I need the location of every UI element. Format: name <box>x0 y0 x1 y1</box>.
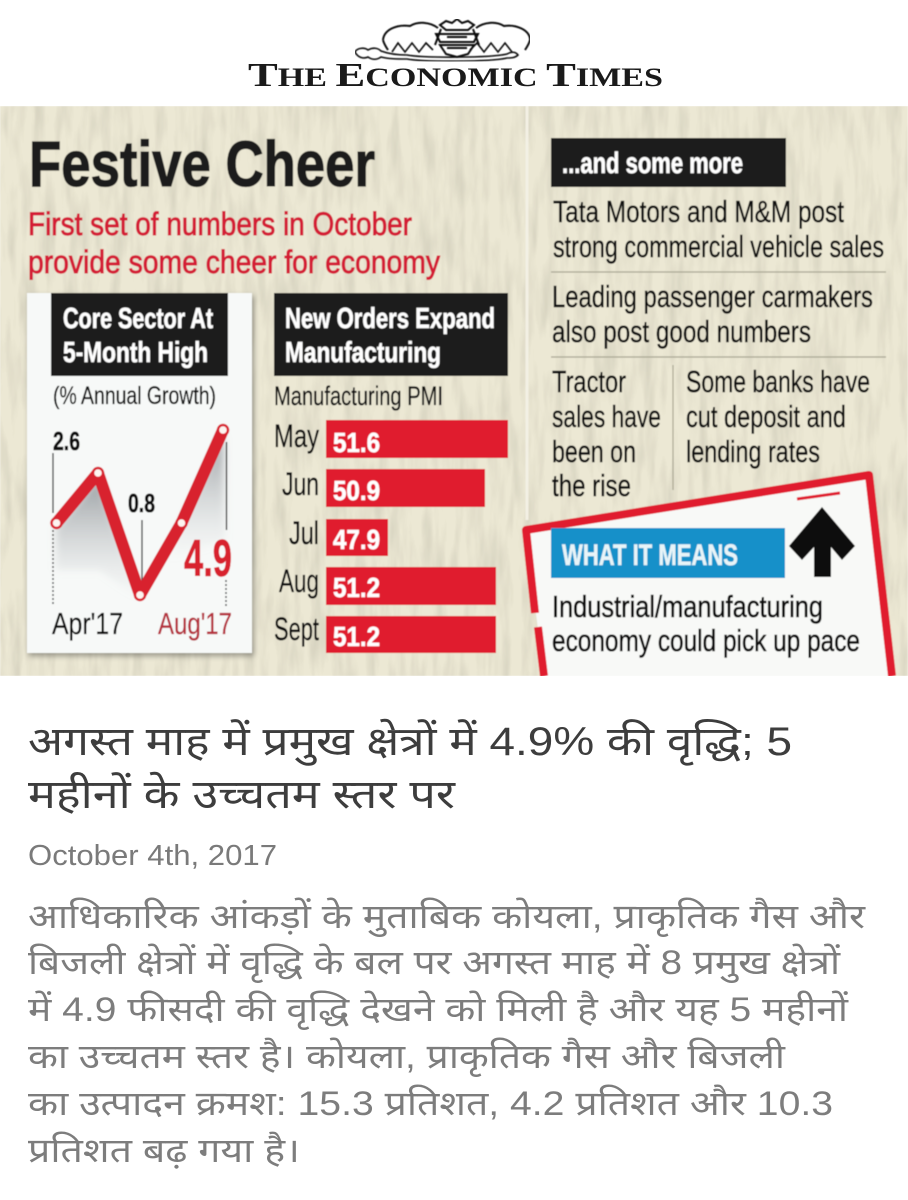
article body: आधिकारिक आंकड़ों के मुताबिक कोयला, प्राकृतिक गैस और <box>28 897 866 937</box>
axis labels: Apr'17 <box>52 606 123 641</box>
data labels: 2.6 <box>53 426 80 456</box>
data labels <box>53 426 232 588</box>
line chart <box>52 425 232 641</box>
icon: up arrow <box>789 507 855 577</box>
item: banks: cut deposit and <box>686 399 846 434</box>
item: banks: lending rates <box>686 434 820 469</box>
header: and some more: ...and some more <box>562 147 743 180</box>
subheading in red <box>28 206 440 280</box>
item: tractor sales: sales have <box>552 399 661 434</box>
item: tractor sales <box>552 364 661 503</box>
bar chart rows: 51.2 <box>333 621 380 652</box>
label: what it means: WHAT IT MEANS <box>562 539 738 572</box>
column divider <box>526 106 528 520</box>
panel: core sector line chart card <box>27 293 252 653</box>
callout: what it means <box>525 473 892 676</box>
item: banks <box>686 364 870 469</box>
axis labels <box>52 606 232 641</box>
bar chart rows: 50.9 <box>333 475 380 506</box>
bar chart rows: 47.9 <box>333 524 380 555</box>
bar chart rows <box>274 418 508 653</box>
article headline: अगस्त माह में प्रमुख क्षेत्रों में 4.9% की वृद्धि; 5 <box>28 719 792 766</box>
icon: lion and elephant emblem <box>355 19 530 61</box>
header: new orders: Manufacturing <box>285 337 441 369</box>
header: and some more <box>551 138 786 187</box>
data labels: 0.8 <box>128 488 155 518</box>
header: new orders <box>274 293 508 376</box>
bar chart rows: Jul <box>289 515 319 551</box>
header: core sector: Core Sector At <box>63 303 213 335</box>
header: core sector: 5-Month High <box>63 337 208 369</box>
item: tractor sales: been on <box>552 434 636 469</box>
article body: का उच्चतम स्तर है। कोयला, प्राकृतिक गैस और बिजली <box>28 1037 786 1077</box>
header: new orders: New Orders Expand <box>285 303 495 335</box>
axis labels: Aug'17 <box>158 606 232 641</box>
article body: प्रतिशत बढ़ गया है। <box>28 1131 300 1170</box>
item: tractor sales: Tractor <box>552 364 626 399</box>
callout text: Industrial/manufacturing <box>552 589 823 624</box>
item: passenger carmakers <box>552 279 873 349</box>
callout text <box>552 589 860 658</box>
article body: में 4.9 फीसदी की वृद्धि देखने को मिली है और यह 5 महीनों <box>28 990 849 1030</box>
data labels: 4.9 <box>184 530 232 588</box>
article date: October 4th, 2017 <box>28 840 277 872</box>
panel: and some more list <box>551 138 886 503</box>
bar chart rows: Aug <box>279 563 319 599</box>
label: what it means <box>551 528 785 578</box>
logo: The Economic Times masthead <box>248 19 663 94</box>
chart label: Manufacturing PMI <box>274 381 443 411</box>
header: core sector <box>51 293 228 376</box>
heading: Festive Cheer: Festive Cheer <box>29 128 375 200</box>
chart unit label: (% Annual Growth) <box>53 382 216 410</box>
item: tractor sales: the rise <box>552 468 631 503</box>
bar chart rows: 51.2 <box>333 572 380 603</box>
masthead wordmark: T HE E CONOMIC T IMES <box>248 57 663 94</box>
bar chart rows: 51.6 <box>333 427 380 458</box>
article body: बिजली क्षेत्रों में वृद्धि के बल पर अगस्त माह में 8 प्रमुख क्षेत्रों <box>28 943 841 983</box>
article body: का उत्पादन क्रमश: 15.3 प्रतिशत, 4.2 प्रतिशत और 10.3 <box>28 1085 833 1123</box>
panel: manufacturing PMI bar chart <box>274 293 508 653</box>
subheading in red: provide some cheer for economy <box>28 244 440 280</box>
article headline <box>28 719 792 817</box>
bar chart rows: Sept <box>274 611 319 647</box>
item: passenger carmakers: also post good numbers <box>552 314 811 349</box>
article body <box>28 897 866 1170</box>
article headline: महीनों के उच्चतम स्तर पर <box>28 772 456 817</box>
item: Tata Motors <box>553 194 884 264</box>
bar chart rows: May <box>274 418 319 454</box>
bar chart rows: Jun <box>282 466 319 502</box>
subheading in red: First set of numbers in October <box>28 206 412 242</box>
panel: newspaper graphic background <box>0 106 908 676</box>
